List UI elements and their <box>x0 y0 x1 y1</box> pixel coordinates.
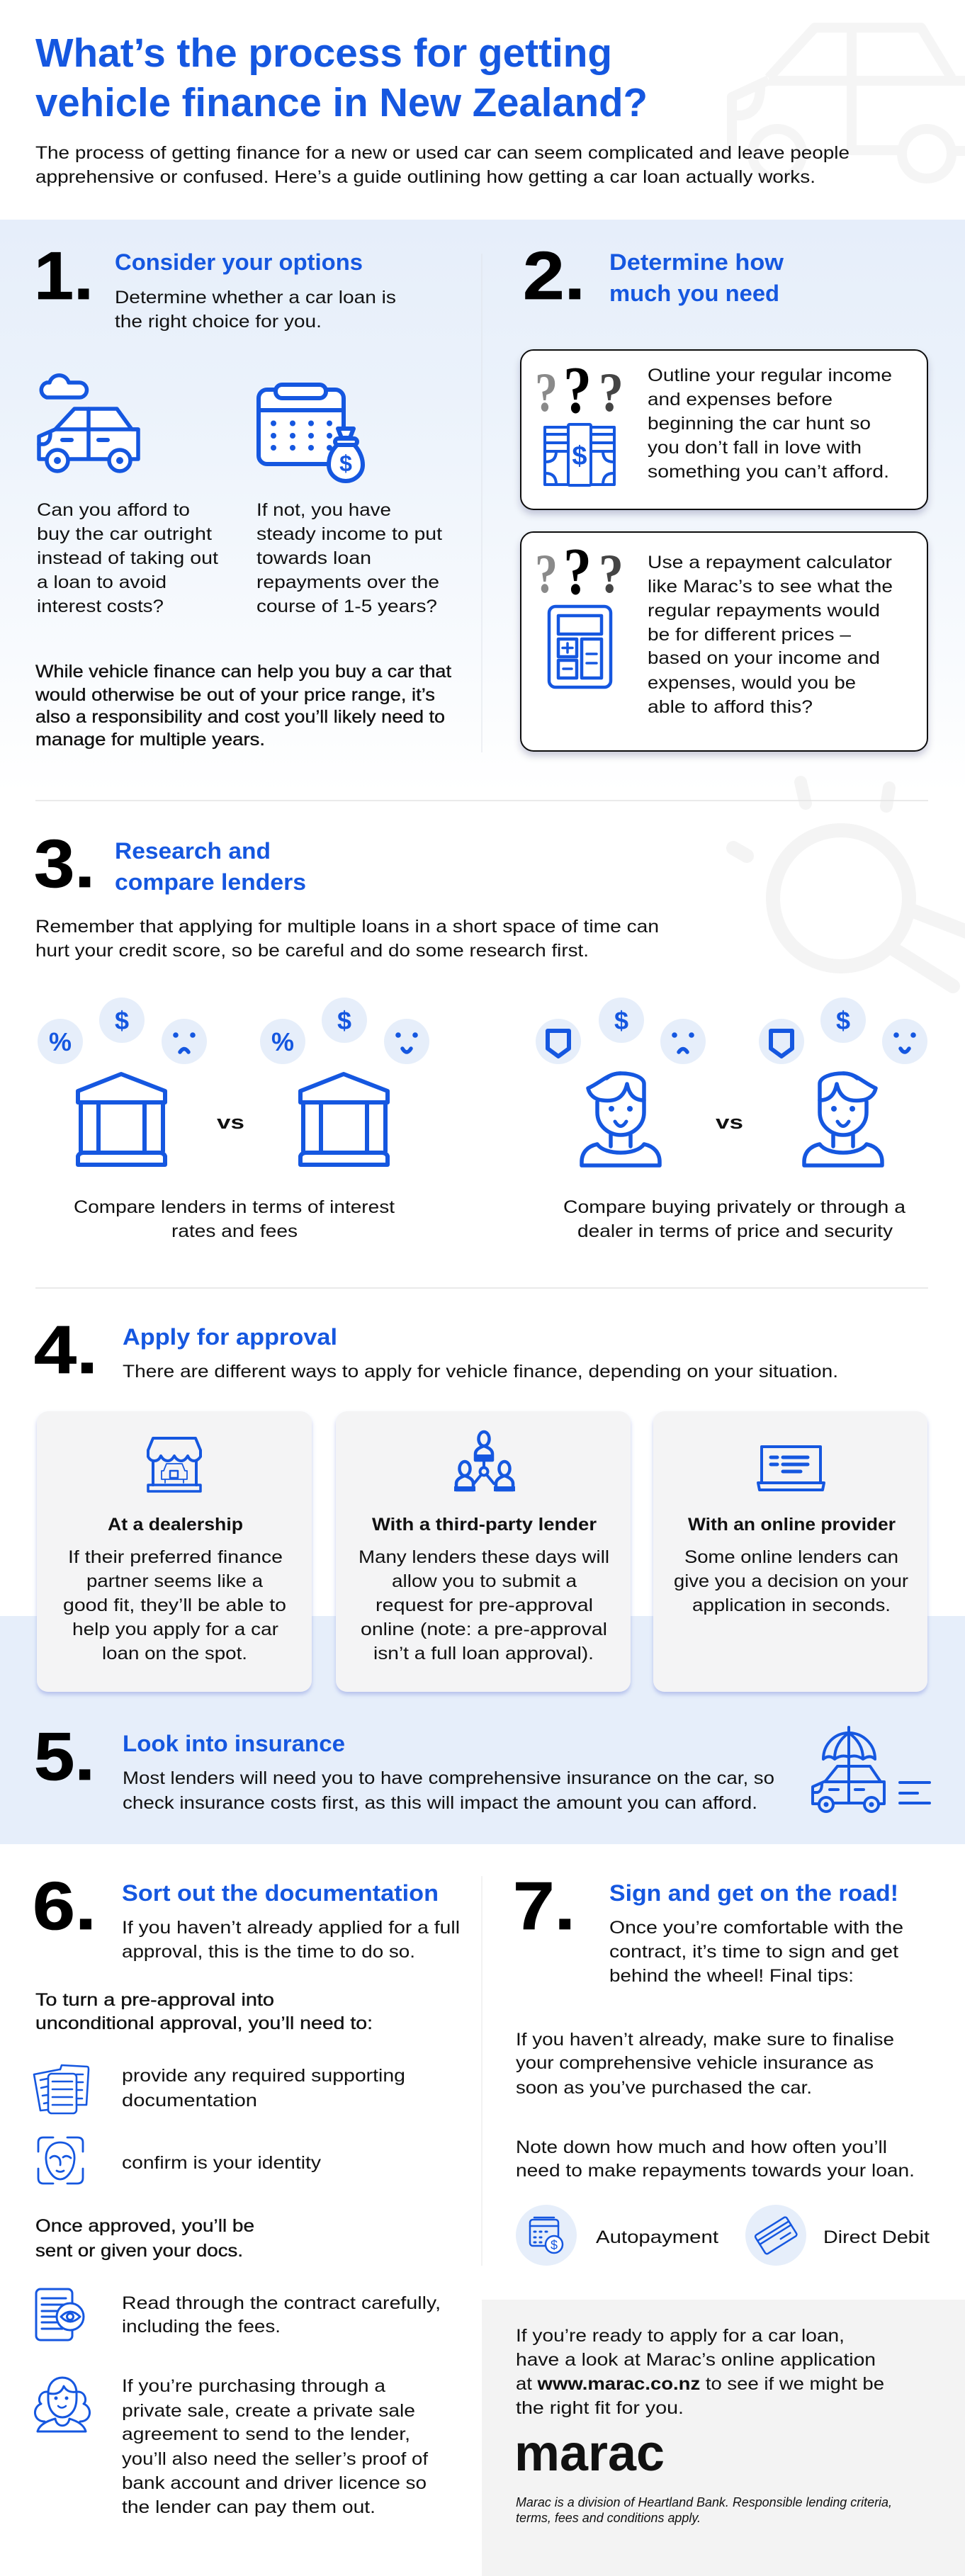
panel: step 1 consider your options <box>34 238 451 750</box>
caption: compare buying: Compare buying privately or through a <box>563 1197 905 1217</box>
text: can you afford: interest costs? <box>37 597 164 616</box>
icon: happy face bubble <box>882 1019 927 1064</box>
text: dealership body: partner seems like a <box>86 1571 263 1591</box>
text: if not: repayments over the <box>256 572 439 592</box>
icon: calculator <box>549 606 611 687</box>
text: can you afford: buy the car outright <box>37 524 212 544</box>
card: outline income <box>521 350 927 509</box>
number 3: 3. <box>34 826 95 902</box>
text: third-party body: request for pre-approval <box>376 1595 593 1615</box>
text: note down <box>516 2137 915 2181</box>
icon: face id <box>38 2137 83 2184</box>
watermark: faded magnifying glass <box>733 782 965 986</box>
text: ready to apply: have a look at Marac’s online application <box>516 2350 876 2370</box>
icon: shield bubble <box>536 1019 581 1064</box>
text: provide documentation: provide any required supporting <box>122 2066 405 2086</box>
text: provide documentation: documentation <box>122 2091 257 2111</box>
panel: step 7 sign and get on the road <box>513 1868 930 2266</box>
icon: interest bubble <box>260 1019 305 1064</box>
text: finalise insurance: If you haven’t already, make sure to finalise <box>516 2030 894 2050</box>
caption: compare buying <box>563 1197 905 1241</box>
text: note down: Note down how much and how often you’ll <box>516 2137 887 2157</box>
heading: sign and get on the road: Sign and get on the road! <box>609 1880 898 1906</box>
icon: sad face bubble <box>660 1019 706 1064</box>
icon: insured car under umbrella <box>813 1727 930 1812</box>
text: remember: Remember that applying for multiple loans in a short space of time can <box>35 917 659 937</box>
text: disclaimer: terms, fees and conditions apply. <box>516 2511 701 2525</box>
text: private sale: agreement to send to the lender, <box>122 2424 410 2444</box>
background: blue gradient band behind steps 1 and 2 <box>0 220 965 793</box>
text: outline your regular income: and expenses before <box>648 390 833 409</box>
text: ready to apply: at www.marac.co.nz to see if we might be <box>516 2374 884 2394</box>
text: full approval <box>122 1918 460 1962</box>
icon: person <box>582 1073 660 1165</box>
number 1: 1. <box>34 238 94 314</box>
icon: dollar bubble <box>599 998 644 1043</box>
icon: laptop <box>758 1447 824 1490</box>
text: use a repayment calculator: be for different prices – <box>648 625 851 645</box>
text: once approved: sent or given your docs. <box>35 2241 243 2261</box>
comparison: lenders <box>38 998 429 1241</box>
panel: call to action <box>514 2326 892 2525</box>
text: to turn a pre-approval <box>35 1990 373 2033</box>
text: third-party body: isn’t a full loan approval). <box>373 1644 594 1663</box>
icon: autopayment: $ <box>551 2238 558 2252</box>
heading: determine how much you need: much you need <box>609 281 779 306</box>
number 6: 6. <box>33 1868 96 1944</box>
text: once comfortable: behind the wheel! Final tips: <box>609 1966 854 1986</box>
text: note down: need to make repayments towards your loan. <box>516 2161 915 2181</box>
text: once comfortable: contract, it’s time to sign and get <box>609 1942 898 1962</box>
text: private sale <box>122 2376 428 2517</box>
heading: with an online provider: With an online provider <box>688 1515 896 1535</box>
text: while vehicle finance: would otherwise be out of your price range, it’s <box>35 685 435 705</box>
label: direct debit: Direct Debit <box>823 2227 930 2247</box>
text: finalise insurance <box>516 2030 894 2098</box>
icon: woman <box>35 2378 90 2431</box>
watermark: faded car <box>732 28 965 179</box>
text: once comfortable <box>609 1918 903 1986</box>
panel: step 5 look into insurance <box>34 1719 930 1813</box>
number 7: 7. <box>513 1868 575 1944</box>
text: outline your regular income: beginning the car hunt so <box>648 414 871 434</box>
icon: dollar bubble: $ <box>836 1006 850 1035</box>
title: What’s the process for getting <box>35 30 612 76</box>
text: dealership body: good fit, they’ll be able to <box>63 1595 286 1615</box>
heading: with a third-party lender: With a third-party lender <box>372 1515 597 1535</box>
icon: dollar bubble <box>820 998 866 1043</box>
icon: dollar bubble: $ <box>337 1006 351 1035</box>
text: outline your regular income: something you can’t afford. <box>648 462 889 482</box>
text: if not: towards loan <box>256 548 371 568</box>
text: online body: give you a decision on your <box>674 1571 908 1591</box>
card: online provider <box>653 1411 927 1692</box>
text: private sale: the lender can pay them out. <box>122 2497 376 2517</box>
caption: compare lenders: rates and fees <box>171 1221 298 1241</box>
heading: determine how much you need <box>609 249 784 306</box>
text: while vehicle finance <box>35 662 451 750</box>
intro text: The process of getting finance for a new or used car can seem complicated and leave people <box>35 143 850 163</box>
title: vehicle finance in New Zealand? <box>35 80 648 125</box>
icon: money stack <box>545 424 614 485</box>
vs label: vs <box>217 1112 244 1133</box>
text: full approval: approval, this is the time to do so. <box>122 1942 415 1962</box>
icon: bank <box>78 1074 165 1165</box>
number 5: 5. <box>34 1719 95 1795</box>
card: third-party lender <box>336 1411 631 1692</box>
text: third-party body: allow you to submit a <box>392 1571 577 1591</box>
icon: money stack: $ <box>572 441 587 471</box>
text: remember: hurt your credit score, so be careful and do some research first. <box>35 941 589 961</box>
text: third-party body <box>359 1547 609 1663</box>
text: outline your regular income <box>648 366 892 482</box>
divider between steps 1 and 2 <box>481 254 482 752</box>
text: if not: course of 1-5 years? <box>256 597 437 616</box>
text: private sale: you’ll also need the seller’s proof of <box>122 2449 428 2469</box>
text: finalise insurance: soon as you’ve purchased the car. <box>516 2078 812 2098</box>
text: determine whether: the right choice for you. <box>115 312 322 332</box>
icon: direct debit card <box>745 2205 806 2266</box>
text: confirm identity: confirm is your identity <box>122 2153 322 2173</box>
heading: research and compare lenders: compare lenders <box>115 869 306 895</box>
icon: question marks <box>535 354 623 427</box>
logo: marac: marac <box>514 2425 665 2482</box>
heading: determine how much you need: Determine how <box>609 249 784 275</box>
icon: autopayment <box>516 2205 577 2266</box>
text: to turn a pre-approval: unconditional approval, you’ll need to: <box>35 2013 373 2033</box>
text: disclaimer <box>516 2495 892 2525</box>
text: different ways: There are different ways to apply for vehicle finance, depending on your situation. <box>123 1362 838 1382</box>
divider between steps 6 and 7 <box>481 1876 482 2266</box>
caption: compare lenders <box>74 1197 395 1241</box>
text: comprehensive insurance <box>123 1768 774 1813</box>
icon: happy face bubble <box>384 1019 429 1064</box>
panel: step 2 determine how much you need <box>521 238 927 751</box>
heading: look into insurance: Look into insurance <box>123 1731 345 1756</box>
icon: bank <box>300 1074 388 1165</box>
text: use a repayment calculator <box>648 553 893 717</box>
text: third-party body: Many lenders these days will <box>359 1547 609 1567</box>
intro text <box>35 143 850 187</box>
heading: apply for approval: Apply for approval <box>123 1324 337 1350</box>
text: online body <box>674 1547 908 1615</box>
text: online body: Some online lenders can <box>684 1547 898 1567</box>
text: if not: steady income to put <box>256 524 442 544</box>
icon: question marks <box>535 535 623 609</box>
text: use a repayment calculator: based on your income and <box>648 648 880 668</box>
text: to turn a pre-approval: To turn a pre-approval into <box>35 1990 274 2010</box>
text: once approved <box>35 2216 254 2261</box>
text: determine whether: Determine whether a car loan is <box>115 288 396 307</box>
text: full approval: If you haven’t already applied for a full <box>122 1918 460 1938</box>
comparison: sellers <box>536 998 927 1241</box>
text: online body: application in seconds. <box>692 1595 891 1615</box>
icon: calendar and money bag <box>259 385 363 481</box>
panel: step 3 research and compare lenders <box>34 826 927 1241</box>
text: use a repayment calculator: Use a repayment calculator <box>648 553 892 572</box>
text: remember <box>35 917 659 961</box>
panel: step 4 apply for approval <box>34 1312 927 1692</box>
number 4: 4. <box>34 1312 98 1388</box>
heading: sort out the documentation: Sort out the documentation <box>122 1880 439 1906</box>
text: can you afford: a loan to avoid <box>37 572 167 592</box>
text: private sale: private sale, create a private sale <box>122 2401 415 2421</box>
text: ready to apply: the right fit for you. <box>516 2398 684 2418</box>
icon: dollar bubble: $ <box>614 1006 628 1035</box>
icon: documents <box>34 2065 89 2113</box>
text: dealership body: loan on the spot. <box>102 1644 247 1663</box>
text: disclaimer: Marac is a division of Heartland Bank. Responsible lending criteria, <box>516 2495 892 2509</box>
text: while vehicle finance: While vehicle finance can help you buy a car that <box>35 662 451 682</box>
intro text: apprehensive or confused. Here’s a guide outlining how getting a car loan actually works. <box>35 167 816 187</box>
text: private sale: bank account and driver licence so <box>122 2473 427 2493</box>
icon: interest bubble: % <box>49 1027 72 1056</box>
text: once approved: Once approved, you’ll be <box>35 2216 254 2236</box>
text: while vehicle finance: manage for multiple years. <box>35 730 265 750</box>
icon: dollar bubble <box>322 998 367 1043</box>
text: use a repayment calculator: expenses, would you be <box>648 673 856 693</box>
icon: interest bubble <box>38 1019 83 1064</box>
background: grey call to action panel <box>482 2300 965 2576</box>
panel: step 6 sort out the documentation <box>33 1868 460 2517</box>
icon: person mirrored <box>804 1073 882 1165</box>
icon: contract with eye <box>36 2289 84 2340</box>
icon: sad face bubble <box>162 1019 207 1064</box>
text: provide documentation <box>122 2066 405 2111</box>
icon: dollar bubble <box>99 998 145 1043</box>
card: at a dealership <box>37 1411 312 1692</box>
text: dealership body <box>63 1547 286 1663</box>
text: once comfortable: Once you’re comfortable with the <box>609 1918 903 1938</box>
card: repayment calculator <box>521 532 927 751</box>
text: private sale: If you’re purchasing through a <box>122 2376 385 2396</box>
text: if not: If not, you have <box>256 500 391 520</box>
text: comprehensive insurance: Most lenders will need you to have comprehensive insurance on the car, so <box>123 1768 774 1788</box>
text: read through: Read through the contract carefully, <box>122 2293 441 2313</box>
text: if not <box>256 500 442 616</box>
heading: consider your options: Consider your options <box>115 249 363 275</box>
text: dealership body: If their preferred finance <box>68 1547 283 1567</box>
text: use a repayment calculator: regular repayments would <box>648 601 880 621</box>
heading: research and compare lenders: Research and <box>115 838 271 864</box>
text: determine whether <box>115 288 396 332</box>
icon: dealership <box>148 1438 201 1491</box>
caption: compare lenders: Compare lenders in terms of interest <box>74 1197 395 1217</box>
icon: calendar and money bag: $ <box>339 451 352 476</box>
text: can you afford: instead of taking out <box>37 548 218 568</box>
text: outline your regular income: you don’t fall in love with <box>648 438 862 458</box>
text: dealership body: help you apply for a car <box>72 1620 278 1639</box>
text: read through: including the fees. <box>122 2317 281 2337</box>
caption: compare buying: dealer in terms of price and security <box>577 1221 893 1241</box>
icon: shield bubble <box>759 1019 804 1064</box>
label: autopayment: Autopayment <box>596 2227 718 2247</box>
text: third-party body: online (note: a pre-approval <box>361 1620 607 1639</box>
icon: interest bubble: % <box>271 1027 294 1056</box>
number 2: 2. <box>523 238 585 314</box>
text: ready to apply: If you’re ready to apply for a car loan, <box>516 2326 845 2346</box>
text: use a repayment calculator: able to afford this? <box>648 697 813 717</box>
background: blue band behind step 5 <box>0 1616 965 1844</box>
icon: network of people <box>454 1432 515 1491</box>
text: can you afford: Can you afford to <box>37 500 190 520</box>
heading: research and compare lenders <box>115 838 306 895</box>
text: while vehicle finance: also a responsibility and cost you’ll likely need to <box>35 707 445 727</box>
text: outline your regular income: Outline your regular income <box>648 366 892 385</box>
heading: at a dealership: At a dealership <box>108 1515 243 1535</box>
title <box>35 30 648 125</box>
text: ready to apply <box>516 2326 884 2418</box>
text: use a repayment calculator: like Marac’s to see what the <box>648 577 893 597</box>
icon: car and cloud <box>39 375 138 471</box>
text: finalise insurance: your comprehensive vehicle insurance as <box>516 2053 874 2073</box>
vs label: vs <box>716 1112 743 1133</box>
icon: dollar bubble: $ <box>115 1006 129 1035</box>
text: read through <box>122 2293 441 2337</box>
text: can you afford <box>37 500 218 616</box>
text: comprehensive insurance: check insurance costs first, as this will impact the amount you can afford. <box>123 1793 757 1813</box>
